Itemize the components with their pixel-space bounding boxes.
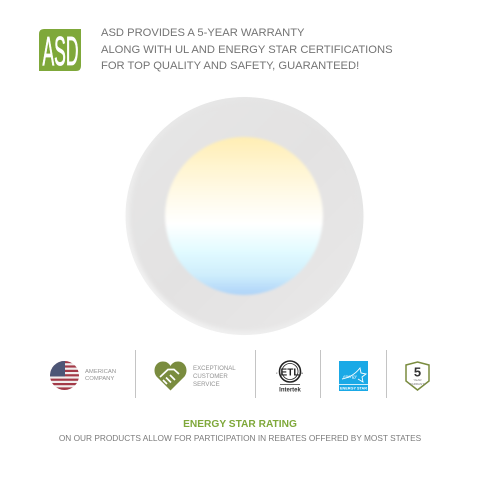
warranty text [101,27,393,72]
warranty text: ALONG WITH UL AND ENERGY STAR CERTIFICATIONS [101,44,393,56]
badge: Energy Star: ENERGY STAR [340,386,367,390]
label [85,368,116,382]
badge: ETL Intertek: c [276,371,278,375]
label: SERVICE [193,380,220,388]
warranty text: FOR TOP QUALITY AND SAFETY, GUARANTEED! [101,60,359,72]
badge: 5 year warranty shield: 5 [414,364,421,380]
rebate text: ON OUR PRODUCTS ALLOW FOR PARTICIPATION IN REBATES OFFERED BY MOST STATES [59,433,421,443]
badge: American company [50,361,116,390]
label: CUSTOMER [193,372,228,380]
badge: ETL Intertek: us [300,371,304,375]
badge: exceptional customer service [154,362,236,390]
label: COMPANY [85,376,114,382]
icon: handshake heart [154,362,186,390]
badge: ETL Intertek [276,360,304,394]
badge: 5 year warranty shield [405,361,430,391]
badge: ETL Intertek: ETL [281,368,299,378]
icon: US flag [50,361,79,390]
badge: Energy Star [339,361,368,391]
product: round LED downlight [126,97,364,335]
heading: Energy Star rating: ENERGY STAR RATING [183,419,297,430]
label: EXCEPTIONAL [193,364,236,372]
badge: 5 year warranty shield: YEAR [413,378,422,382]
label: AMERICAN [85,368,116,374]
badge: 5 year warranty shield: WARRANTY [409,382,426,386]
label [193,364,236,388]
badge: ETL Intertek: Intertek [279,388,301,394]
warranty text: ASD PROVIDES A 5-YEAR WARRANTY [101,27,304,39]
badge: Energy Star: energy [343,375,357,380]
